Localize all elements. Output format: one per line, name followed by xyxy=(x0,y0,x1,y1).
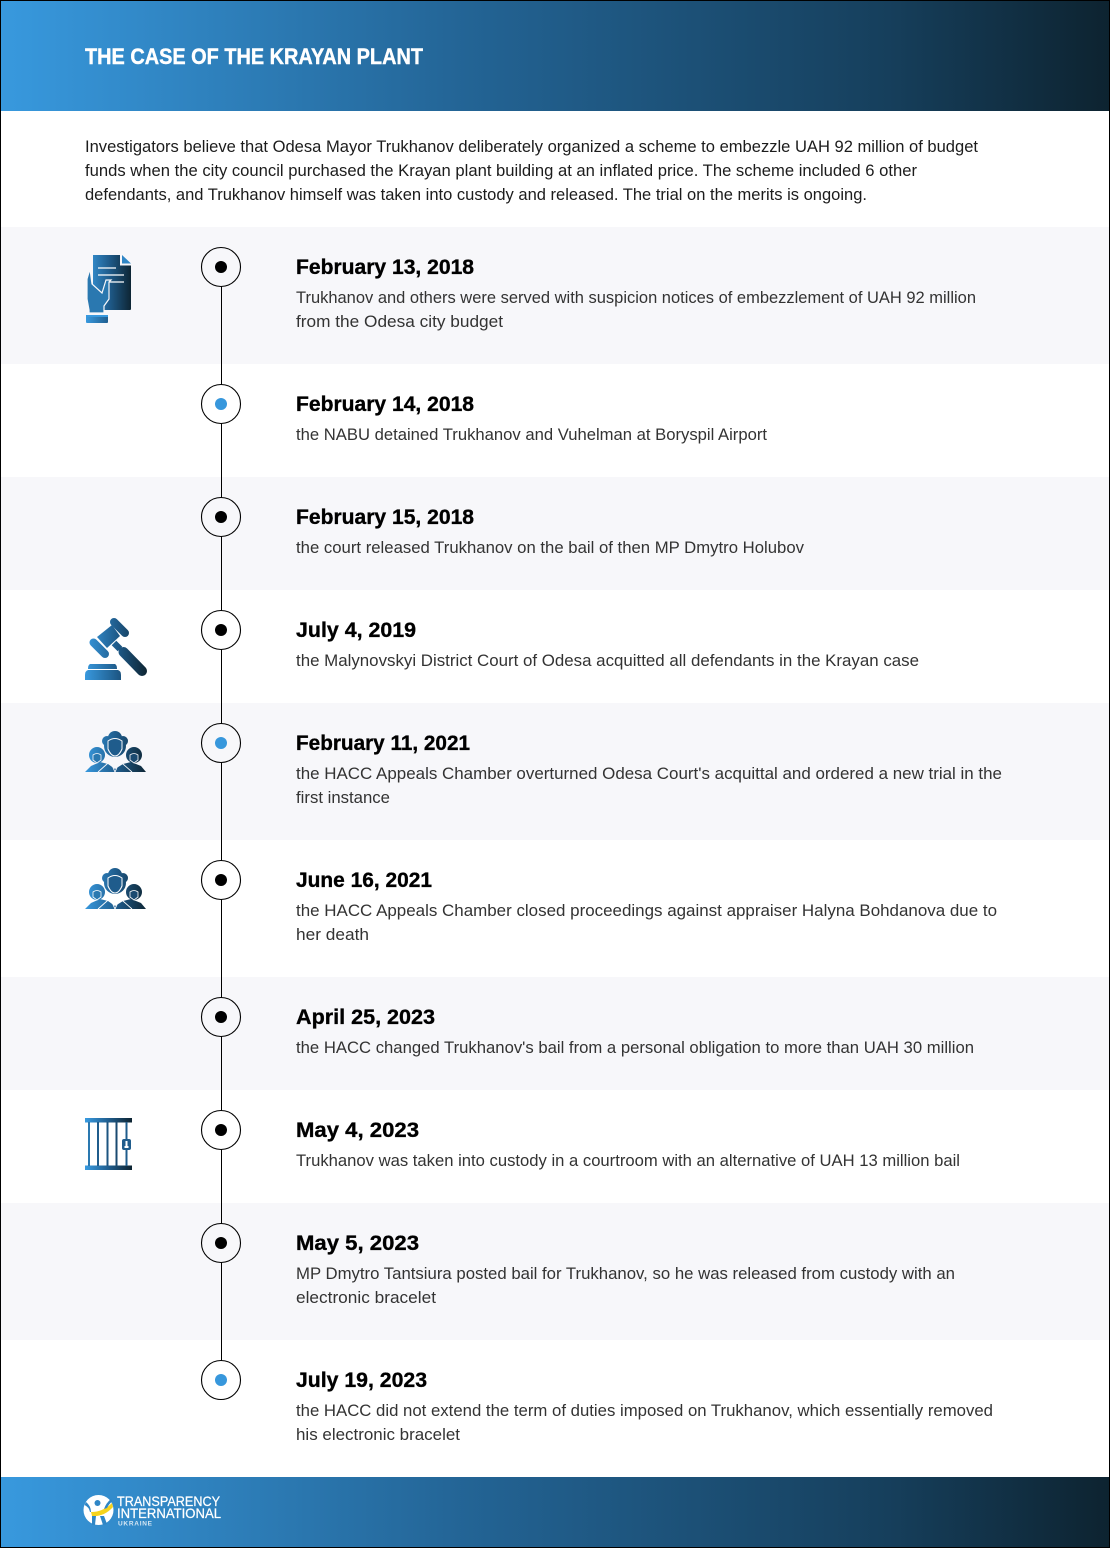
icon: group of people xyxy=(85,868,146,909)
icon: document in hand xyxy=(86,255,131,323)
entry: April 25, 2023 xyxy=(202,998,974,1057)
entry: May 4, 2023: Trukhanov was taken into custody in a courtroom with an alternative of UAH 13 million bail xyxy=(296,1152,960,1170)
footer banner xyxy=(0,1477,1110,1548)
entry: July 19, 2023: his electronic bracelet xyxy=(296,1426,460,1444)
entry: June 16, 2021: her death xyxy=(296,926,369,944)
entry: February 15, 2018: February 15, 2018 xyxy=(296,505,474,529)
entry: May 4, 2023: May 4, 2023 xyxy=(296,1118,419,1142)
entry: February 14, 2018: the NABU detained Trukhanov and Vuhelman at Boryspil Airport xyxy=(296,426,767,444)
icon: jail bars xyxy=(85,1118,132,1170)
icon: gavel xyxy=(85,622,142,680)
entry: February 14, 2018: February 14, 2018 xyxy=(296,392,474,416)
entry: February 15, 2018 xyxy=(202,498,805,557)
timeline line xyxy=(221,267,222,1380)
entry: February 11, 2021: February 11, 2021 xyxy=(296,731,470,755)
intro text: defendants, and Trukhanov himself was taken into custody and released. The trial on the merits is ongoing. xyxy=(85,186,867,204)
entry: June 16, 2021: June 16, 2021 xyxy=(296,868,432,892)
intro text xyxy=(85,138,978,204)
entry: May 4, 2023 xyxy=(202,1110,960,1170)
entry: February 13, 2018 xyxy=(202,248,976,331)
entry: June 16, 2021: the HACC Appeals Chamber closed proceedings against appraiser Halyna Bohdanova due to xyxy=(296,902,997,920)
entry: February 11, 2021 xyxy=(202,724,1002,807)
entry: July 19, 2023: the HACC did not extend the term of duties imposed on Trukhanov, which essentially removed xyxy=(296,1402,993,1420)
entry: July 19, 2023: July 19, 2023 xyxy=(296,1368,427,1392)
footer logo: TRANSPARENCY xyxy=(117,1493,221,1509)
intro text: funds when the city council purchased the Krayan plant building at an inflated price. The scheme included 6 other xyxy=(85,162,917,180)
footer logo: UKRAINE xyxy=(118,1520,153,1528)
row backgrounds xyxy=(0,227,1110,1340)
footer logo xyxy=(84,1493,221,1528)
entry: May 5, 2023: MP Dmytro Tantsiura posted bail for Trukhanov, so he was released from custody with an xyxy=(296,1265,955,1283)
entry: February 11, 2021: the HACC Appeals Chamber overturned Odesa Court's acquittal and ordered a new trial in the xyxy=(296,765,1002,783)
entry: May 5, 2023: May 5, 2023 xyxy=(296,1231,419,1255)
entry: April 25, 2023: the HACC changed Trukhanov's bail from a personal obligation to more than UAH 30 million xyxy=(296,1039,974,1057)
entry: July 4, 2019: the Malynovskyi District Court of Odesa acquitted all defendants in the Krayan case xyxy=(296,652,919,670)
entry: July 4, 2019: July 4, 2019 xyxy=(296,618,416,642)
entry: February 11, 2021: first instance xyxy=(296,789,390,807)
entry: February 14, 2018 xyxy=(202,384,767,444)
entry: July 19, 2023 xyxy=(202,1360,993,1444)
title: THE CASE OF THE KRAYAN PLANT xyxy=(85,44,424,69)
entry: February 15, 2018: the court released Trukhanov on the bail of then MP Dmytro Holubov xyxy=(296,539,805,557)
entry: February 13, 2018: from the Odesa city budget xyxy=(296,313,503,331)
entry: February 13, 2018: February 13, 2018 xyxy=(296,255,474,279)
entry: June 16, 2021 xyxy=(202,860,997,944)
header banner xyxy=(0,0,1110,111)
entry: July 4, 2019 xyxy=(202,610,919,670)
icon: group of people xyxy=(85,731,146,772)
footer logo: INTERNATIONAL xyxy=(117,1505,221,1521)
entry: May 5, 2023: electronic bracelet xyxy=(296,1289,436,1307)
intro text: Investigators believe that Odesa Mayor Trukhanov deliberately organized a scheme to embezzle UAH 92 million of budget xyxy=(85,138,978,156)
entry: February 13, 2018: Trukhanov and others were served with suspicion notices of embezzlement of UAH 92 million xyxy=(296,289,976,307)
entry: April 25, 2023: April 25, 2023 xyxy=(296,1005,435,1029)
entry: May 5, 2023 xyxy=(202,1224,955,1307)
